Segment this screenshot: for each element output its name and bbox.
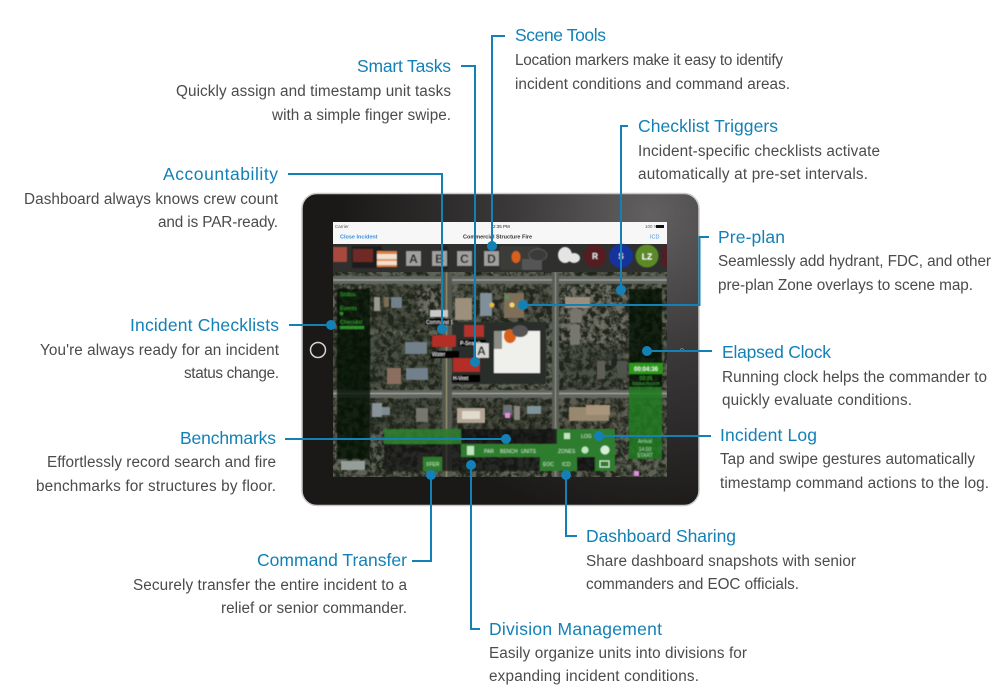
zone letter tiles: A (409, 252, 418, 266)
R marker (584, 244, 606, 268)
callout: incident log: Tap and swipe gestures automatically (720, 451, 975, 468)
status and nav bar: 100 % (645, 224, 658, 229)
callout: scene tools: Scene Tools (515, 25, 606, 45)
map units: Command 1 (426, 320, 453, 326)
callout: smart tasks (176, 56, 480, 367)
callout: pre-plan: Seamlessly add hydrant, FDC, and other (718, 253, 991, 270)
callout: scene tools: Location markers make it easy to identify (515, 52, 783, 69)
scene tools toolbar (333, 244, 667, 272)
callout: incident checklists: Incident Checklists (130, 315, 279, 335)
zone letter tiles: D (487, 252, 496, 266)
callout: checklist triggers: Incident-specific checklists activate (638, 143, 880, 160)
zone letter tiles (406, 251, 499, 266)
bottom command menu: UNITS (521, 449, 537, 455)
callout: benchmarks: benchmarks for structures by floor. (36, 478, 276, 495)
callout: division management (466, 460, 747, 685)
callout: pre-plan: Pre-plan (718, 227, 785, 247)
road barrier (376, 253, 398, 266)
tablet (302, 194, 699, 506)
LZ marker (636, 244, 658, 268)
camera (680, 348, 684, 352)
screen (333, 222, 667, 477)
callout: smart tasks: Quickly assign and timestamp unit tasks (176, 83, 451, 100)
callout: elapsed clock: quickly evaluate conditions. (722, 392, 912, 409)
tablet bezel (302, 194, 699, 506)
status and nav bar: 2:35 PM (493, 224, 510, 229)
S marker (609, 244, 633, 268)
callout: scene tools (487, 25, 790, 251)
callout: command transfer: Command Transfer (257, 550, 407, 570)
left status panel: Status (340, 292, 356, 298)
callout: incident checklists (40, 315, 336, 382)
status and nav bar (333, 222, 667, 244)
bottom command menu: BENCH (500, 449, 518, 455)
callout: division management: Division Management (489, 619, 662, 639)
callout: dashboard sharing: Dashboard Sharing (586, 526, 736, 546)
map units: A (477, 344, 486, 358)
dark smoke (522, 259, 542, 270)
bottom command menu: XFER (426, 462, 440, 468)
right clock panel: 00:04:36 (634, 367, 659, 373)
callout: dashboard sharing: commanders and EOC officials. (586, 576, 799, 593)
bottom command menu: PAR (484, 449, 494, 455)
callout: benchmarks (36, 428, 511, 495)
callout: division management: Easily organize units into divisions for (489, 645, 747, 662)
callout: smart tasks: Smart Tasks (357, 56, 451, 76)
callout: incident log (594, 425, 989, 492)
map units: H-Vent (453, 376, 469, 382)
buildings (455, 298, 472, 320)
map units: P-Search (460, 341, 481, 347)
callout: accountability: Dashboard always knows crew count (24, 191, 279, 208)
callout: command transfer: relief or senior commander. (221, 600, 407, 617)
bottom command menu: ZONES (558, 449, 576, 455)
status and nav bar: ICD (650, 234, 660, 240)
status and nav bar: Carrier (335, 224, 349, 229)
parking lot (452, 322, 546, 384)
right clock panel: 14:00 (639, 447, 651, 453)
callout: division management: expanding incident conditions. (489, 668, 699, 685)
bottom command menu (384, 429, 615, 471)
bottom command menu: EOC (543, 462, 554, 468)
callout: dashboard sharing (561, 470, 856, 593)
callout: smart tasks: with a simple finger swipe. (271, 107, 451, 124)
callout: incident checklists: You're always ready for an incident (40, 342, 280, 359)
callout: checklist triggers: automatically at pre-set intervals. (638, 166, 868, 183)
left status panel (337, 289, 370, 459)
status and nav bar: Commercial Structure Fire (463, 234, 532, 240)
right clock panel: START (637, 453, 653, 459)
callout: accountability: and is PAR-ready. (158, 214, 278, 231)
roads (333, 276, 667, 284)
bottom command menu: ICD (562, 462, 571, 468)
callout: command transfer: Securely transfer the entire incident to a (133, 577, 407, 594)
scene tools toolbar: S (618, 252, 624, 261)
callout: checklist triggers: Checklist Triggers (638, 116, 778, 136)
callout: benchmarks: Benchmarks (180, 428, 276, 448)
callout: pre-plan (518, 227, 991, 310)
callout: scene tools: incident conditions and command areas. (515, 76, 790, 93)
home button (310, 342, 326, 358)
map texture (333, 272, 667, 477)
scene tools toolbar: R (592, 252, 598, 261)
bottom command menu: LOG (581, 434, 592, 440)
aerial map (333, 272, 667, 477)
zone letter tiles: B (435, 252, 444, 266)
callout: accountability (24, 164, 447, 334)
callout: elapsed clock (642, 342, 987, 409)
callout: accountability: Accountability (163, 164, 278, 184)
status and nav bar: Close Incident (340, 234, 378, 240)
fire engines (333, 247, 347, 262)
right clock panel: Arrival (638, 439, 652, 445)
callout: elapsed clock: Elapsed Clock (722, 342, 831, 362)
callout: elapsed clock: Running clock helps the commander to (722, 369, 987, 386)
right clock panel (629, 289, 663, 459)
callout: command transfer (133, 470, 436, 617)
callout: benchmarks: Effortlessly record search and fire (47, 454, 276, 471)
scene tools toolbar: LZ (642, 252, 652, 262)
map units: Water (432, 352, 445, 358)
callout: incident log: Incident Log (720, 425, 817, 445)
callout: incident checklists: status change. (184, 365, 279, 382)
callout: dashboard sharing: Share dashboard snapshots with senior (586, 553, 856, 570)
white smoke (558, 247, 572, 263)
map units (425, 310, 528, 382)
callout: checklist triggers (616, 116, 880, 295)
fire icon (512, 251, 520, 263)
left status panel: Checklist (340, 320, 363, 326)
callout: pre-plan: pre-plan Zone overlays to scene map. (718, 277, 973, 294)
markers (490, 302, 494, 308)
left status panel: Events (340, 306, 357, 312)
callout: incident log: timestamp command actions to the log. (720, 475, 989, 492)
right clock panel: 00:35 (640, 376, 652, 382)
right clock panel: Status Report (632, 381, 661, 386)
zone letter tiles: C (460, 252, 469, 266)
